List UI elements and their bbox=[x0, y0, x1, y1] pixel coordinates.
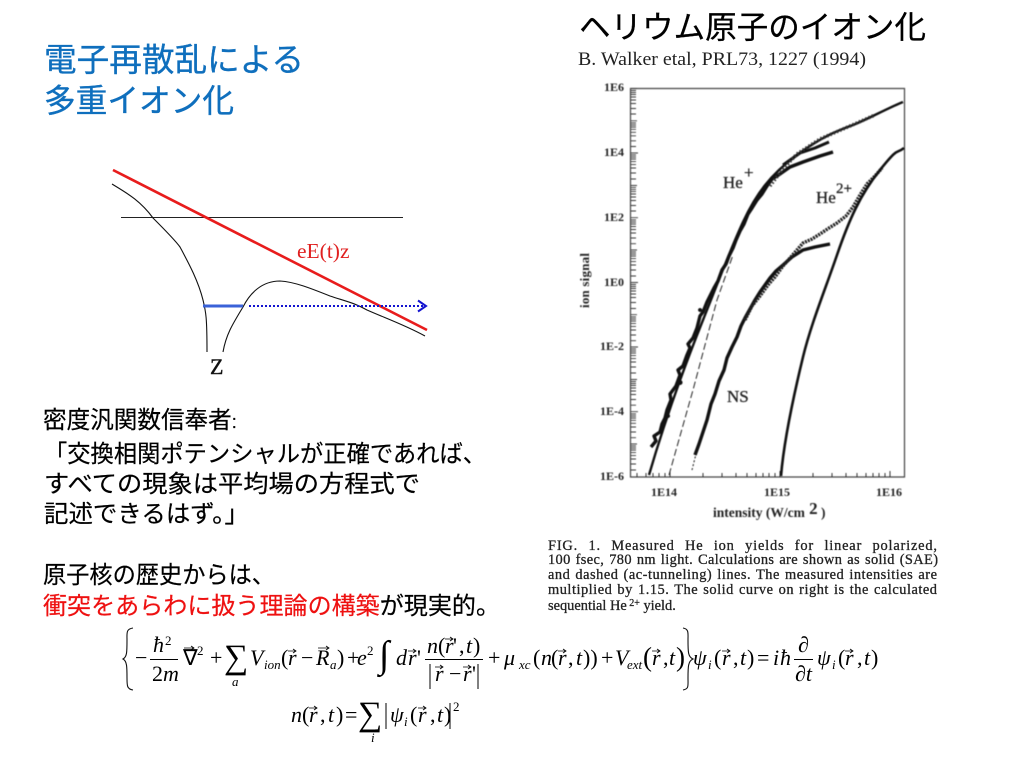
ion potential: r bbox=[288, 645, 297, 670]
Hartree term: e bbox=[357, 645, 367, 670]
external potential: + bbox=[601, 645, 613, 670]
Hartree term: r bbox=[435, 661, 444, 686]
series labels: 2+ bbox=[836, 181, 852, 197]
right hand side: i bbox=[773, 645, 779, 670]
text block: DFT believers bbox=[43, 407, 486, 528]
kinetic term: ∇ bbox=[182, 645, 198, 670]
equation: electron density: , bbox=[320, 702, 326, 727]
y axis labels: 1E4 bbox=[604, 145, 624, 159]
ion potential: V bbox=[250, 645, 266, 670]
equation: electron density: ( bbox=[302, 702, 309, 727]
figure caption: 2+ bbox=[627, 598, 640, 609]
right brace bbox=[683, 628, 693, 690]
right hand side: , bbox=[733, 645, 738, 670]
external potential: ) bbox=[676, 642, 685, 672]
right hand side: r bbox=[722, 645, 731, 670]
equation: electron density: ∑ bbox=[358, 696, 382, 733]
left brace bbox=[123, 628, 133, 690]
external potential: V bbox=[615, 645, 631, 670]
x axis title: ) bbox=[818, 505, 826, 520]
x axis ticks bbox=[637, 471, 890, 477]
equation: electron density: i bbox=[371, 730, 375, 745]
chart: He ion yields bbox=[577, 80, 904, 520]
right hand side: t bbox=[740, 645, 747, 670]
external potential: t bbox=[669, 645, 676, 670]
equation: electron density: t bbox=[328, 702, 335, 727]
title: electron rescattering bbox=[44, 42, 304, 119]
right hand side: ħ bbox=[780, 645, 791, 670]
equation: electron density: ) bbox=[336, 702, 343, 727]
figure caption: sequential He bbox=[548, 598, 627, 614]
text block: DFT believers: すべての現象は平均場の方程式で bbox=[44, 471, 420, 498]
xc potential: ( bbox=[551, 645, 558, 670]
right hand side: ) bbox=[871, 645, 878, 670]
xc potential: μ bbox=[503, 645, 515, 670]
citation: B. Walker etal, PRL73, 1227 (1994) bbox=[578, 50, 866, 70]
Hartree term bbox=[347, 633, 483, 689]
x axis labels: 1E16 bbox=[876, 485, 902, 499]
xc potential: + bbox=[488, 645, 500, 670]
text block: nuclear history: 原子核の歴史からは、 bbox=[43, 562, 275, 589]
series labels bbox=[723, 163, 852, 406]
Hartree term: r bbox=[408, 645, 417, 670]
right hand side: r bbox=[845, 645, 854, 670]
Hartree term: ) bbox=[473, 633, 480, 658]
y axis labels: 1E-2 bbox=[600, 339, 624, 353]
curve: dashed tunneling bbox=[669, 255, 733, 475]
y axis labels: 1E0 bbox=[604, 275, 624, 289]
xc potential bbox=[488, 645, 598, 672]
equation: electron density: ψ bbox=[390, 702, 404, 727]
red field line bbox=[113, 170, 427, 330]
xc potential: t bbox=[576, 645, 583, 670]
equation: electron density: ( bbox=[410, 702, 417, 727]
right hand side: ( bbox=[838, 645, 845, 670]
right hand side bbox=[693, 632, 878, 686]
external potential: ( bbox=[643, 642, 652, 672]
figure caption bbox=[548, 538, 938, 614]
Hartree term: ' bbox=[453, 633, 457, 658]
Hartree term: r bbox=[463, 661, 472, 686]
xc potential: )) bbox=[583, 645, 598, 670]
equation: electron density: t bbox=[437, 702, 444, 727]
equation: electron density: 2 bbox=[453, 699, 460, 714]
text block: nuclear history: 衝突をあらわに扱う理論の構築 が現実的。 bbox=[43, 593, 500, 620]
xc potential: r bbox=[558, 645, 567, 670]
vector arrows bbox=[184, 637, 853, 669]
right hand side: ( bbox=[714, 645, 721, 670]
x axis title: intensity (W/cm bbox=[713, 505, 805, 520]
x axis title: 2 bbox=[805, 499, 818, 518]
series labels: He bbox=[816, 188, 836, 207]
text block: nuclear history bbox=[43, 562, 500, 620]
curve: He2+ data bbox=[692, 168, 882, 470]
ion potential: ( bbox=[281, 645, 288, 670]
figure caption: yield. bbox=[640, 598, 676, 614]
title: electron rescattering: 電子再散乱による bbox=[44, 42, 304, 78]
Hartree term: 2 bbox=[367, 643, 374, 658]
ion potential: a bbox=[232, 674, 239, 689]
potential curve right bbox=[223, 281, 425, 352]
title: electron rescattering: 多重イオン化 bbox=[44, 83, 234, 119]
xc potential: n bbox=[541, 645, 552, 670]
heading: helium atom ionization: ヘリウム原子のイオン化 bbox=[579, 9, 926, 45]
y axis labels bbox=[600, 80, 624, 483]
figure caption: 100 fsec, 780 nm light. Calculations are shown as solid (SAE) bbox=[548, 552, 938, 568]
external potential: ext bbox=[627, 657, 643, 672]
equation: electron density: r bbox=[309, 702, 318, 727]
ion potential: ion bbox=[264, 657, 281, 672]
Hartree term: ' bbox=[417, 645, 421, 670]
series labels: He bbox=[723, 173, 743, 192]
right hand side: ) bbox=[747, 645, 754, 670]
Hartree term: ∫ bbox=[377, 634, 392, 678]
kinetic term: − bbox=[135, 645, 147, 670]
ion potential: ) bbox=[337, 645, 344, 670]
equation: electron density: ) bbox=[444, 702, 451, 727]
label: field: eE(t)z bbox=[297, 239, 350, 263]
right hand side: i bbox=[708, 657, 712, 672]
figure caption: and dashed (ac-tunneling) lines. The measured intensities are bbox=[548, 567, 937, 583]
equation: electron density: n bbox=[291, 702, 302, 727]
ion potential bbox=[210, 639, 344, 689]
right hand side: ψ bbox=[817, 645, 831, 670]
xc potential: xc bbox=[518, 657, 531, 672]
equation: electron density: i bbox=[404, 714, 408, 729]
equation: electron density: = bbox=[345, 702, 357, 727]
right hand side: ∂ bbox=[798, 632, 809, 657]
Hartree term: ( bbox=[438, 633, 445, 658]
ion potential: R bbox=[315, 645, 330, 670]
x axis labels: 1E15 bbox=[764, 485, 790, 499]
right hand side: i bbox=[832, 657, 836, 672]
text block: DFT believers: 「交換相関ポテンシャルが正確であれば、 bbox=[44, 441, 486, 468]
kinetic term: 2 bbox=[165, 633, 172, 648]
curve: He+ SAE bbox=[649, 102, 903, 475]
right hand side: = bbox=[757, 645, 769, 670]
right hand side: , bbox=[857, 645, 862, 670]
kinetic term: ħ bbox=[153, 632, 164, 657]
y axis labels: 1E6 bbox=[604, 80, 624, 94]
kinetic term: 2m bbox=[152, 661, 179, 686]
y axis ticks bbox=[631, 88, 638, 470]
y axis labels: 1E2 bbox=[604, 210, 624, 224]
label: Z: Z bbox=[210, 354, 223, 379]
y axis title: ion signal bbox=[577, 253, 592, 308]
plot frame bbox=[630, 88, 904, 477]
Hartree term: , bbox=[459, 633, 464, 658]
y axis labels: 1E-6 bbox=[600, 469, 624, 483]
Hartree term: t bbox=[466, 633, 473, 658]
xc potential: ( bbox=[533, 645, 540, 670]
kinetic term: 2 bbox=[197, 643, 204, 658]
x axis labels: 1E14 bbox=[651, 485, 677, 499]
Hartree term: d bbox=[396, 645, 408, 670]
series labels: + bbox=[744, 163, 754, 182]
equation: electron density: r bbox=[418, 702, 427, 727]
y axis labels: 1E-4 bbox=[600, 404, 624, 418]
equation: electron density bbox=[291, 696, 460, 745]
Hartree term: n bbox=[427, 633, 438, 658]
equation: time-dependent Kohn-Sham bbox=[123, 628, 878, 690]
external potential: , bbox=[663, 645, 668, 670]
xc potential: , bbox=[568, 645, 574, 670]
equation: electron density: , bbox=[430, 702, 436, 727]
curve: sequential He2+ bbox=[781, 148, 904, 476]
ion potential: − bbox=[301, 645, 313, 670]
ion potential: a bbox=[330, 657, 337, 672]
Hartree term: − bbox=[449, 661, 461, 686]
figure caption: multiplied by 1.15. The solid curve on right is the calculated bbox=[548, 582, 938, 598]
series labels: NS bbox=[727, 387, 749, 406]
right hand side: ∂t bbox=[795, 661, 813, 686]
text block: DFT believers: 密度汎関数信奉者: bbox=[43, 407, 237, 434]
tunneling arrow bbox=[249, 300, 426, 312]
potential curve left bbox=[112, 184, 207, 352]
right hand side: ψ bbox=[693, 645, 707, 670]
ion potential: + bbox=[210, 645, 222, 670]
external potential: r bbox=[652, 645, 661, 670]
ion potential: ∑ bbox=[224, 639, 248, 676]
text block: DFT believers: 記述できるはず。」 bbox=[44, 501, 249, 528]
Hartree term: + bbox=[347, 645, 359, 670]
Hartree term: ' bbox=[472, 661, 476, 686]
right hand side: t bbox=[864, 645, 871, 670]
Hartree term: r bbox=[445, 633, 454, 658]
kinetic term bbox=[135, 632, 204, 686]
external potential bbox=[601, 642, 685, 672]
energy level line bbox=[121, 216, 403, 218]
diagram: tunnel ionization potential bbox=[112, 170, 427, 379]
x axis labels bbox=[651, 485, 902, 499]
figure caption: FIG. 1. Measured He ion yields for linear polarized, bbox=[548, 538, 937, 554]
bound level bbox=[203, 304, 243, 308]
curve: He+ data bbox=[647, 115, 875, 449]
